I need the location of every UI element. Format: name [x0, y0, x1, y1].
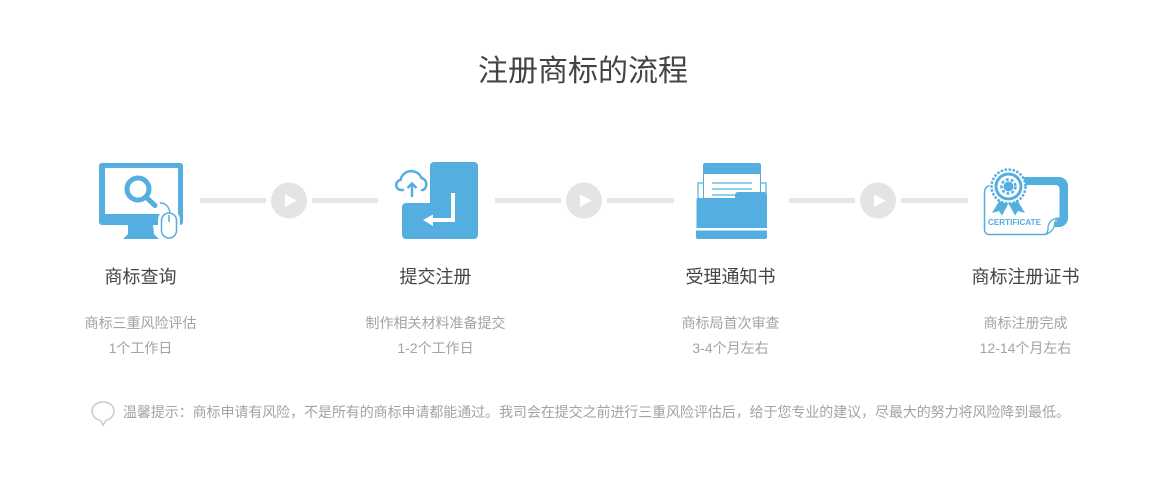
heading: 商标注册证书 [972, 267, 1080, 287]
duration: 1-2个工作日 [397, 340, 474, 356]
step 4: registration certificate [972, 170, 1080, 356]
tip notice [92, 402, 1070, 425]
duration: 3-4个月左右 [692, 340, 769, 356]
icon: certificate with rosette [984, 170, 1068, 234]
description: 商标注册完成 [984, 315, 1068, 331]
duration: 12-14个月左右 [980, 340, 1071, 356]
tip text: 温馨提示：商标申请有风险，不是所有的商标申请都能通过。我司会在提交之前进行三重风险评估后，给于您专业的建议，尽最大的努力将风险降到最低。 [123, 402, 1070, 422]
icon: folder with document [696, 163, 767, 239]
step 3: acceptance notice [682, 163, 780, 356]
description: 商标局首次审查 [682, 315, 780, 331]
icon: monitor with magnifier and mouse [99, 163, 183, 240]
icon: speech bubble [92, 402, 114, 425]
step 1: trademark search [84, 163, 196, 356]
description: 商标三重风险评估 [84, 315, 196, 331]
heading: 受理通知书 [686, 267, 776, 287]
icon: certificate with rosette: CERTIFICATE [988, 218, 1042, 227]
step 2: submit application [366, 162, 506, 356]
duration: 1个工作日 [109, 340, 172, 356]
description: 制作相关材料准备提交 [366, 315, 506, 331]
heading: 提交注册 [400, 267, 472, 287]
heading: 商标查询 [104, 267, 176, 287]
arrow connector 3 [789, 182, 968, 218]
title: 注册商标的流程 [478, 55, 688, 88]
arrow connector 1 [200, 182, 378, 218]
icon: upload cloud and return arrow panel [396, 162, 478, 239]
arrow connector 2 [495, 182, 674, 218]
